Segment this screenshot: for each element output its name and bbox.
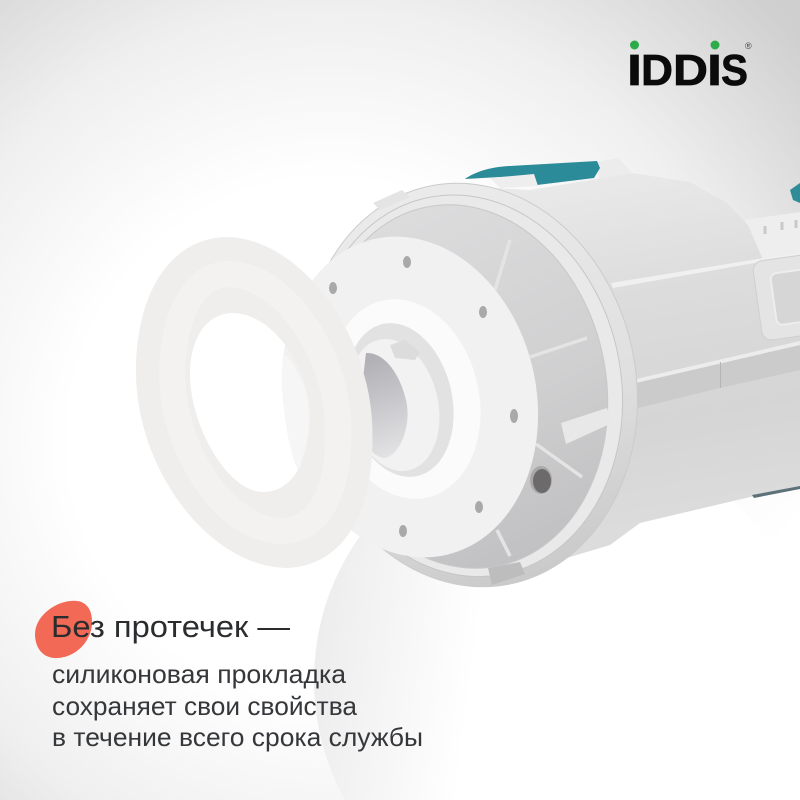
cylinder body — [440, 173, 800, 584]
logo wordmark: D — [673, 46, 708, 95]
struts — [495, 240, 587, 556]
body text: сохраняет свои свойства — [52, 691, 358, 721]
lower rib highlight — [636, 341, 800, 383]
logo wordmark: D — [641, 46, 673, 95]
end ring — [268, 154, 672, 616]
collar — [310, 284, 500, 514]
body text — [52, 659, 423, 752]
drain hole — [530, 466, 552, 494]
lower rib panel — [636, 343, 800, 408]
ring tab top — [373, 190, 410, 210]
logo dot left — [630, 40, 639, 50]
body text: в течение всего срока службы — [52, 722, 423, 752]
logo wordmark: S — [721, 46, 748, 95]
rear teal clip — [790, 183, 800, 203]
white strap — [490, 174, 538, 188]
side tab on ring — [561, 408, 612, 444]
flange disc — [251, 211, 569, 583]
tube tabs — [390, 340, 420, 360]
gasket inner tone — [172, 274, 338, 531]
logo wordmark: I — [627, 46, 642, 95]
ring tab bottom — [488, 562, 525, 585]
registered mark: ® — [745, 41, 752, 51]
flange seen through gasket hole — [282, 355, 309, 470]
teal lever — [465, 161, 600, 185]
upper rib — [611, 252, 800, 288]
side clip — [752, 252, 800, 341]
body text: силиконовая прокладка — [52, 659, 347, 689]
silicone gasket — [136, 237, 373, 568]
underside teal detail — [752, 486, 800, 498]
product: cistern drain valve — [251, 154, 800, 616]
logo: IDDIS — [627, 40, 752, 95]
logo dot right — [710, 40, 720, 50]
white handle — [596, 158, 640, 182]
heading: Без протечек — — [51, 609, 290, 644]
flange holes — [329, 256, 518, 537]
collar inner — [332, 312, 468, 488]
background white glow — [400, 380, 800, 800]
inner tube — [336, 330, 452, 480]
background circle — [314, 432, 800, 800]
tube cavity — [358, 353, 408, 458]
rear ribbed part — [745, 212, 800, 270]
lower seam — [720, 362, 721, 388]
icon: coral blob — [35, 601, 92, 658]
logo wordmark: I — [707, 46, 722, 95]
logo wordmark — [627, 46, 748, 95]
